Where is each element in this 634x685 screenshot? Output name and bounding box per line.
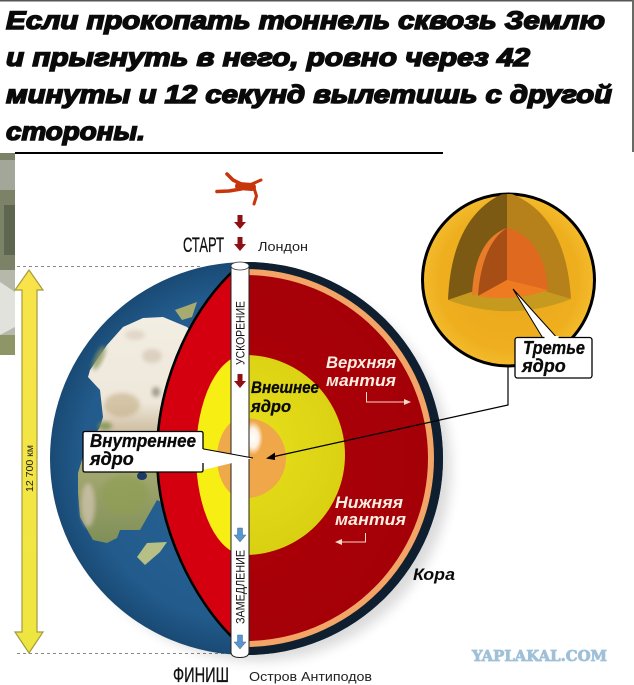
inner sphere: floor xyxy=(478,280,548,298)
arrow: upper mantle xyxy=(366,392,411,405)
cross-section: right half xyxy=(250,269,434,647)
callout: inner core xyxy=(83,431,253,472)
soft shadow under the globe xyxy=(65,275,451,661)
inner sphere: rim xyxy=(472,228,507,296)
watermark: YAPLAKAL.COM xyxy=(471,648,607,665)
island: southern Europe xyxy=(175,302,197,320)
arrow: deceleration upper xyxy=(234,528,246,542)
cutaway: floor xyxy=(448,280,571,311)
island: Madagascar xyxy=(137,542,167,565)
continent: Africa xyxy=(78,317,200,543)
label: London: Лондон xyxy=(258,239,308,254)
title: Если прокопать тоннель сквозь Землю xyxy=(6,7,605,35)
label: upper mantle: мантия xyxy=(326,371,396,390)
arrow: acceleration xyxy=(234,374,246,388)
inner sphere: left face xyxy=(478,228,507,296)
cutaway: right wall xyxy=(507,192,571,299)
leader line: third core to centre xyxy=(266,367,508,460)
callout: inner core: ядро xyxy=(89,449,134,469)
title: минуты и 12 секунд вылетишь с другой xyxy=(6,81,612,109)
tunnel xyxy=(231,262,249,658)
arrow: deceleration lower xyxy=(234,635,246,649)
inner sphere: right face xyxy=(507,228,548,290)
diameter arrow: 12 700 km: 12 700 км xyxy=(25,445,36,492)
callout: third core: Третье xyxy=(523,338,585,358)
divider under title xyxy=(15,152,443,154)
label: Antipodes island: Остров Антиподов xyxy=(249,669,372,684)
photo fragments at the page edges xyxy=(0,0,634,355)
cutaway: left wall xyxy=(448,192,507,300)
label: acceleration: УСКОРЕНИЕ xyxy=(236,301,248,365)
label: lower mantle: Нижняя xyxy=(335,493,403,512)
arrow: fall direction lower xyxy=(234,237,246,251)
callout: third core xyxy=(513,289,592,378)
arrow: fall direction upper xyxy=(234,215,246,229)
title xyxy=(6,7,612,146)
title: и прыгнуть в него, ровно через 42 xyxy=(6,44,530,72)
callout: inner core: Внутреннее xyxy=(90,431,196,451)
callout: third core: ядро xyxy=(521,356,566,376)
label: crust: Кора xyxy=(413,565,455,584)
dashed guide top xyxy=(17,266,200,268)
inset: third core sphere xyxy=(422,192,594,366)
label: lower mantle: мантия xyxy=(335,510,406,529)
label: lower mantle xyxy=(335,493,406,529)
label: deceleration: ЗАМЕДЛЕНИЕ xyxy=(236,550,248,624)
cross-section: left half xyxy=(156,272,230,638)
title: стороны. xyxy=(6,118,145,146)
dashed guide bottom xyxy=(17,652,230,654)
label: outer core xyxy=(250,379,319,416)
label: start: СТАРТ xyxy=(183,234,224,257)
dark crust rim xyxy=(244,262,443,655)
label: upper mantle: Верхняя xyxy=(326,353,396,372)
label: outer core: ядро xyxy=(250,398,291,416)
diameter arrow: 12 700 km xyxy=(15,270,43,653)
arrow: lower mantle xyxy=(335,533,366,545)
label: outer core: Внешнее xyxy=(251,379,319,397)
globe xyxy=(50,262,443,655)
icon: falling person xyxy=(217,174,261,204)
label: upper mantle xyxy=(326,353,396,390)
